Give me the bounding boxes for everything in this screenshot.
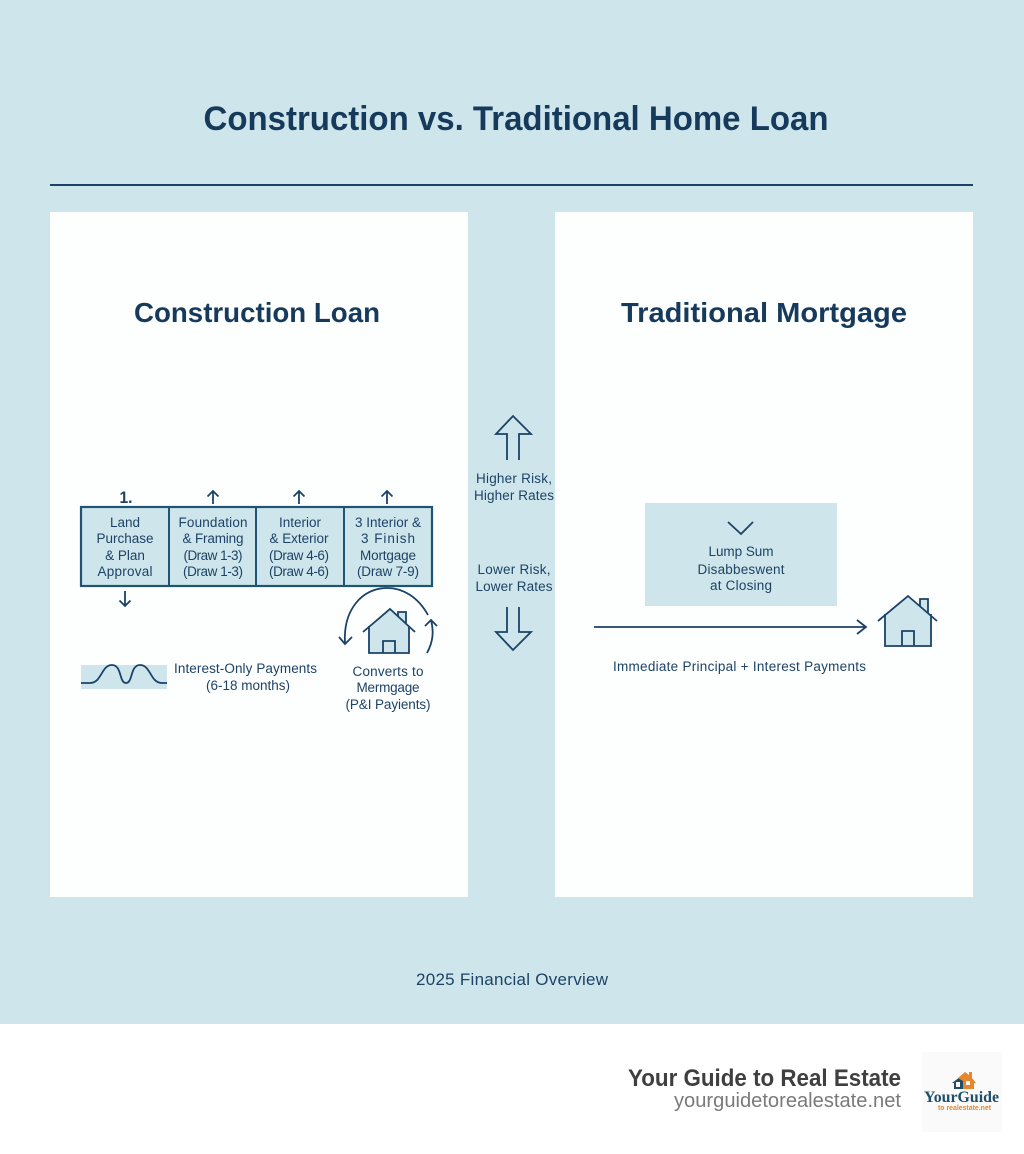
stage 3 text: & Exterior — [270, 531, 329, 546]
callout: lump sum disbursement: Disabbeswent — [698, 562, 785, 577]
stage 3 text: (Draw 4-6) — [269, 564, 329, 579]
panel: traditional mortgage — [555, 212, 973, 897]
text: converts to mortgage: Mermgage — [356, 680, 420, 695]
stage 1 text: Purchase — [96, 531, 154, 546]
text: interest-only payments: Interest-Only Payments — [174, 661, 317, 676]
stage 3 text: (Draw 4-6) — [269, 548, 329, 563]
text: interest-only payments: (6-18 months) — [206, 678, 290, 693]
stage 2 text: (Draw 1-3) — [183, 564, 243, 579]
stage 2 text: Foundation — [178, 515, 248, 530]
text: interest-only payments — [174, 661, 317, 693]
stage 3 text — [269, 515, 329, 579]
icon: house with conversion arrows — [339, 588, 437, 653]
text: converts to mortgage: (P&I Payients) — [346, 697, 430, 712]
text: immediate payments: Immediate Principal + Interest Payments — [613, 659, 866, 674]
stage 1 text: & Plan — [105, 548, 145, 563]
stage 2 text: & Framing — [182, 531, 244, 546]
footer brand text — [628, 1065, 901, 1112]
stage 2 text — [178, 515, 248, 579]
text: lower risk: Lower Rates — [476, 579, 553, 594]
draw stages flow — [81, 488, 432, 606]
stage 4 text — [355, 515, 421, 579]
text: higher risk: Higher Risk, — [476, 471, 552, 486]
stage 2 text: (Draw 1-3) — [184, 548, 242, 563]
icon: down arrow — [496, 607, 531, 650]
stage 3 text: Interior — [279, 515, 322, 530]
logo — [922, 1052, 1002, 1132]
text: higher risk: Higher Rates — [474, 488, 554, 503]
logo: YourGuide — [924, 1089, 999, 1106]
stage 4 text: (Draw 7-9) — [357, 564, 419, 579]
stage marker arrows: 1. — [120, 488, 132, 507]
stage 1 text — [96, 515, 154, 579]
caption: financial overview: 2025 Financial Overview — [416, 970, 609, 989]
arrow: down from stage 1 — [120, 591, 130, 606]
stage 4 text: 3 Finish — [361, 531, 415, 546]
callout: lump sum disbursement: Lump Sum — [708, 544, 774, 559]
text: lower risk: Lower Risk, — [478, 562, 550, 577]
stage 1 text: Approval — [98, 564, 152, 579]
icon: house — [878, 596, 937, 646]
comparison: higher risk — [474, 416, 554, 503]
icon: up arrow — [496, 416, 531, 460]
arrow: to house — [594, 620, 866, 634]
text: higher risk — [474, 471, 554, 503]
callout: lump sum disbursement — [645, 503, 837, 606]
stage boxes — [81, 507, 432, 586]
footer brand text: Your Guide to Real Estate — [628, 1065, 901, 1092]
stage 4 text: 3 Interior & — [355, 515, 421, 530]
icon: logo house — [952, 1072, 976, 1089]
title: Construction vs. Traditional Home Loan — [204, 100, 828, 138]
comparison: lower risk — [476, 562, 553, 650]
text: lower risk — [476, 562, 553, 594]
logo: to realestate.net — [938, 1103, 991, 1112]
heading: traditional mortgage: Traditional Mortgage — [621, 297, 907, 328]
text: converts to mortgage: Converts to — [352, 664, 424, 679]
icon: interest-only wave — [81, 665, 167, 689]
footer brand text: yourguidetorealestate.net — [674, 1090, 901, 1112]
stage 1 text: Land — [110, 515, 140, 530]
text: converts to mortgage — [346, 664, 430, 712]
callout: lump sum disbursement: at Closing — [710, 578, 772, 593]
stage 4 text: Mortgage — [360, 548, 416, 563]
heading: construction loan: Construction Loan — [134, 297, 380, 328]
stage marker arrows — [120, 488, 392, 507]
panel: construction loan — [50, 212, 468, 897]
